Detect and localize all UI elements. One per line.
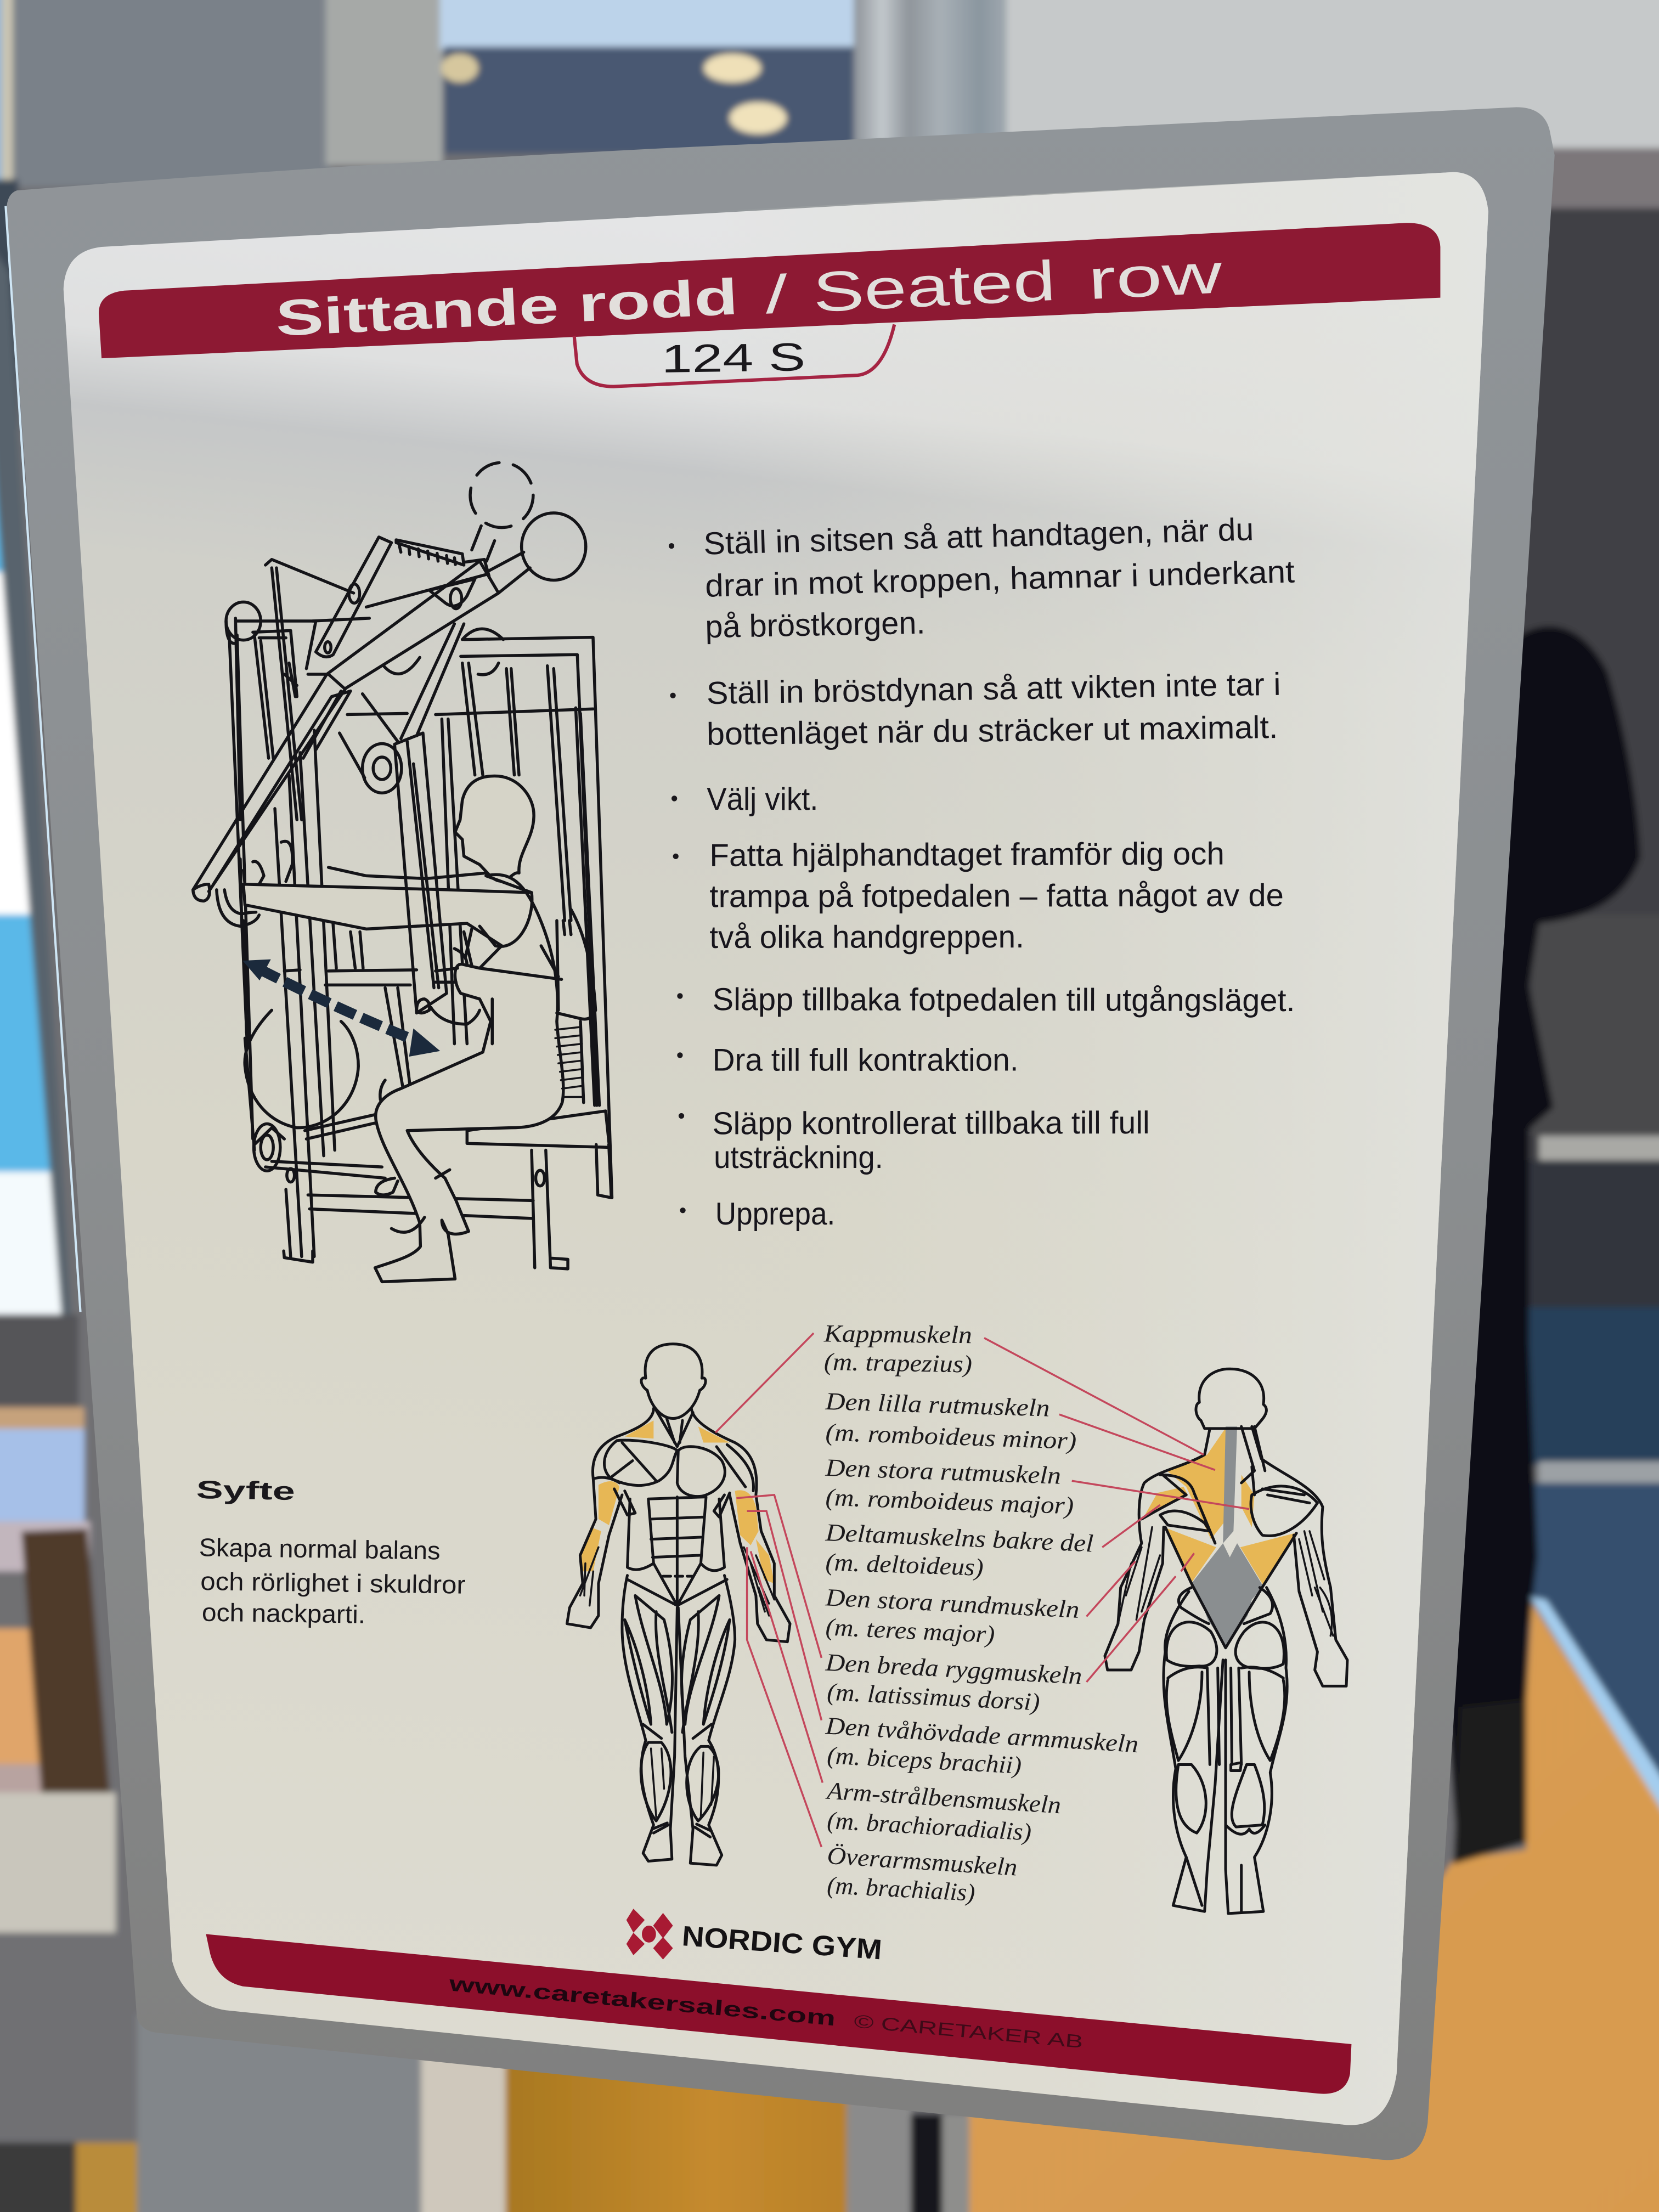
logo mark	[627, 1909, 673, 1960]
muscle labels: Arm-strålbensmuskeln	[825, 1776, 1062, 1819]
purpose block: Syfte: Skapa normal balans	[199, 1533, 441, 1565]
purpose block: Syfte: och rörlighet i skuldror	[200, 1567, 466, 1599]
purpose block: Syfte: Syfte	[196, 1475, 295, 1505]
muscle labels: (m. deltoideus)	[825, 1548, 984, 1581]
purpose block: Syfte: och nackparti.	[202, 1598, 366, 1629]
instruction text: Släpp kontrollerat tillbaka till full	[712, 1105, 1150, 1141]
title: Swedish and English: row	[1087, 241, 1224, 311]
title: Swedish and English: Sittande rodd	[274, 268, 739, 347]
back pad and hatching	[555, 910, 596, 1103]
muscle labels: Den stora rutmuskeln	[825, 1454, 1062, 1489]
muscle labels: Den breda ryggmuskeln	[825, 1649, 1083, 1690]
muscle labels: Deltamuskelns bakre del	[825, 1519, 1094, 1557]
pulleys	[226, 602, 261, 640]
muscle labels: (m. trapezius)	[824, 1348, 972, 1378]
muscle labels: (m. romboideus major)	[825, 1483, 1074, 1520]
instruction text	[703, 512, 1295, 1232]
muscle labels: (m. brachioradialis)	[826, 1807, 1032, 1846]
instruction bullets	[669, 543, 686, 1213]
instruction text: utsträckning.	[714, 1140, 883, 1175]
logo: Nordic Gym	[627, 1909, 883, 1965]
weight stack shape	[245, 1010, 358, 1128]
muscle labels: Den tvåhövdade armmuskeln	[825, 1712, 1139, 1758]
instruction text: bottenläget när du sträcker ut maximalt.	[707, 710, 1278, 752]
machine number tab	[574, 324, 894, 387]
lever arms and handles	[193, 462, 586, 1024]
machine number tab: 124 S	[661, 335, 805, 381]
muscle labels: (m. latissimus dorsi)	[826, 1678, 1041, 1716]
back grey latissimus area	[1192, 1426, 1263, 1648]
muscle labels: (m. teres major)	[825, 1613, 995, 1648]
instruction text: drar in mot kroppen, hamnar i underkant	[704, 554, 1295, 604]
header band	[99, 223, 1440, 358]
white instruction card	[64, 172, 1488, 2125]
machine frame	[226, 568, 612, 1269]
muscle labels: Kappmuskeln	[823, 1319, 972, 1348]
movement arrow	[242, 960, 440, 1057]
instruction text: Släpp tillbaka fotpedalen till utgångsläget.	[713, 982, 1295, 1018]
title: Swedish and English	[274, 241, 1224, 347]
person behind the sign	[1446, 626, 1640, 1860]
title: Swedish and English: /	[764, 264, 790, 325]
footer text: www.caretakersales.com	[447, 1972, 837, 2030]
back body	[1105, 1369, 1347, 1914]
instruction text: Välj vikt.	[707, 782, 818, 817]
instruction text: på bröstkorgen.	[705, 606, 926, 645]
muscle labels: (m. biceps brachii)	[826, 1741, 1022, 1779]
logo: Nordic Gym: NORDIC GYM	[681, 1920, 883, 1965]
footer text: © CARETAKER AB	[853, 2011, 1084, 2052]
illustration: seated row machine with user	[193, 462, 612, 1282]
front highlighted muscles	[580, 1420, 774, 1583]
muscle labels	[823, 1319, 1139, 1906]
instruction text: två olika handgreppen.	[709, 919, 1024, 955]
muscle labels: Den stora rundmuskeln	[825, 1583, 1080, 1623]
instruction text: Ställ in sitsen så att handtagen, när du	[703, 512, 1254, 562]
instruction text: Fatta hjälphandtaget framför dig och	[709, 837, 1224, 873]
footer text	[447, 1972, 1084, 2052]
title: Swedish and English: Seated	[811, 249, 1057, 324]
instruction text: trampa på fotpedalen – fatta något av de	[709, 878, 1284, 914]
footer band	[206, 1934, 1351, 2094]
muscle labels: (m. brachialis)	[826, 1871, 976, 1906]
red callout lines	[715, 1333, 1249, 1847]
muscle labels: Överarmsmuskeln	[826, 1842, 1018, 1881]
instruction text: Ställ in bröstdynan så att vikten inte tar i	[706, 667, 1281, 711]
muscle labels: (m. romboideus minor)	[825, 1418, 1077, 1454]
front body	[567, 1344, 790, 1865]
seated person	[244, 776, 563, 1282]
muscle labels: Den lilla rutmuskeln	[825, 1387, 1050, 1422]
back highlighted muscles	[1143, 1426, 1295, 1585]
anatomy chart: front and back body with muscles	[567, 1333, 1347, 1914]
purpose block: Syfte	[196, 1475, 466, 1629]
instruction text: Upprepa.	[715, 1197, 835, 1232]
instruction text: Dra till full kontraktion.	[713, 1043, 1019, 1078]
